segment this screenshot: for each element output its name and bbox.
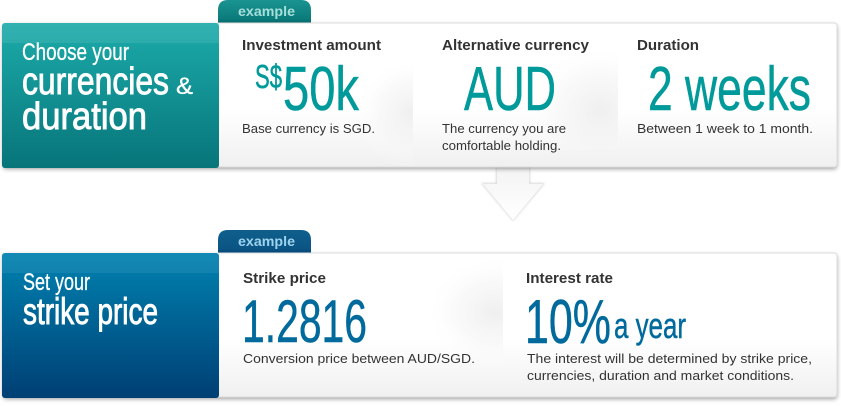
investment amount: 50k <box>283 55 360 124</box>
panel: choose currencies and duration <box>2 0 837 175</box>
investment amount <box>242 37 381 136</box>
strike price: Conversion price between AUD/SGD. <box>243 351 475 366</box>
investment amount: S$ <box>255 58 282 95</box>
strike price: 1.2816 <box>242 288 367 355</box>
interest rate: 10% <box>525 288 611 357</box>
example tab <box>218 0 311 23</box>
interest rate <box>525 270 812 383</box>
interest rate: The interest will be determined by strike price, <box>527 351 812 366</box>
white content card <box>216 23 837 167</box>
blue heading block <box>2 253 219 398</box>
alternative currency: comfortable holding. <box>442 138 561 153</box>
panel: strike price <box>2 230 837 399</box>
teal heading block: duration <box>22 96 147 138</box>
white content card <box>216 253 837 397</box>
blue heading block: Set your <box>23 269 90 296</box>
teal heading block: & <box>176 73 193 100</box>
strike price: Strike price <box>243 270 326 287</box>
investment amount: Base currency is SGD. <box>242 121 375 136</box>
alternative currency: The currency you are <box>442 121 566 136</box>
alternative currency: Alternative currency <box>442 37 590 54</box>
investment amount: Investment amount <box>242 37 381 54</box>
example tab: example <box>238 233 295 249</box>
duration: Between 1 week to 1 month. <box>637 121 813 136</box>
teal heading block: currencies <box>22 61 169 103</box>
alternative currency: AUD <box>464 55 556 124</box>
example tab <box>218 230 311 253</box>
teal heading block <box>2 23 219 168</box>
interest rate: Interest rate <box>526 270 613 287</box>
interest rate: currencies, duration and market conditions. <box>527 368 794 383</box>
interest rate: a year <box>614 305 686 346</box>
duration: Duration <box>637 37 699 54</box>
arrow between panels <box>481 166 545 221</box>
example tab: example <box>238 3 295 19</box>
alternative currency <box>442 37 590 153</box>
teal heading block: Choose your <box>22 39 129 66</box>
duration <box>637 37 813 136</box>
strike price <box>242 270 475 366</box>
blue heading block: strike price <box>23 291 158 332</box>
